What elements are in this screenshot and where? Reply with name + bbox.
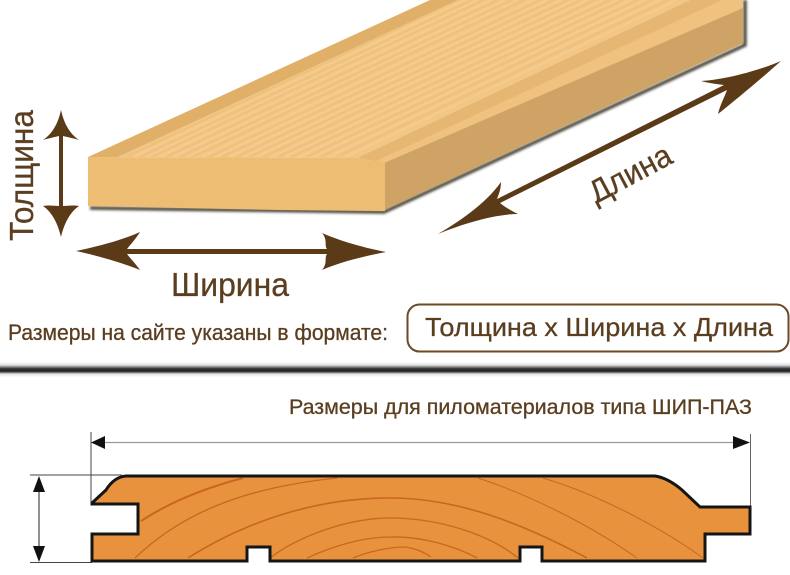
profile width dimension: [91, 432, 750, 507]
caption: size format: Размеры на сайте указаны в формате:: [8, 320, 388, 345]
bottom arrowhead: [33, 546, 45, 562]
label: thickness: Толщина: [3, 109, 40, 241]
wood grain rings: [135, 478, 703, 558]
right bevel highlight: [376, 0, 743, 163]
tongue and groove profile: [92, 476, 750, 561]
3D wooden board: [88, 0, 745, 212]
front face: [88, 157, 385, 211]
arrow: width: [76, 232, 386, 270]
left arrowhead: [91, 436, 105, 449]
board top surface: [118, 0, 690, 158]
board shadow: [90, 0, 745, 212]
left bevel strip: [88, 0, 458, 157]
label: length: Длина: [582, 137, 678, 210]
box text: Толщина х Ширина х Длина: [425, 312, 774, 342]
heading: tongue and groove: Размеры для пиломатериалов типа ШИП-ПАЗ: [289, 396, 752, 419]
box outline: [408, 304, 788, 352]
label: width: Ширина: [171, 266, 290, 303]
right bevel strip: [357, 0, 743, 163]
arrow: length: [438, 61, 781, 234]
side face: [384, 8, 743, 210]
profile thickness dimension: [30, 475, 122, 562]
arrow: thickness: [43, 110, 79, 237]
profile outline: [92, 476, 750, 561]
format box: [408, 304, 788, 352]
profile body: [92, 476, 750, 561]
top arrowhead: [33, 476, 45, 492]
right arrowhead: [733, 436, 750, 449]
top surface grain: [126, 0, 677, 157]
